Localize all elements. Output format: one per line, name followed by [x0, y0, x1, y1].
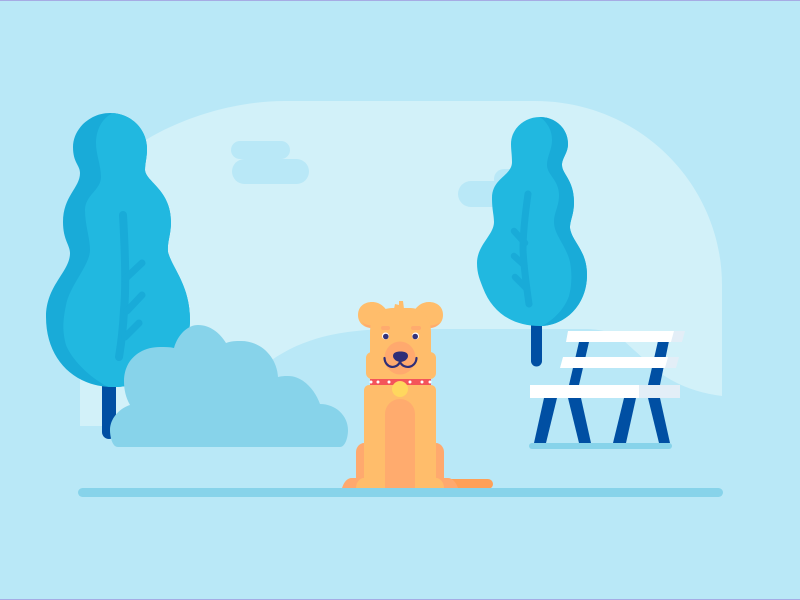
bench ground shadow — [529, 443, 672, 449]
left tree — [46, 113, 190, 439]
bench seat plank — [530, 385, 680, 398]
cloud left — [231, 141, 309, 184]
dog head — [366, 301, 436, 379]
dog tail — [440, 479, 493, 489]
dog collar tag — [392, 381, 408, 397]
dog right ear — [414, 302, 443, 328]
bench legs — [534, 341, 670, 443]
pale backdrop panel — [80, 101, 722, 426]
bottom border line — [0, 599, 800, 600]
dog left ear — [358, 302, 387, 328]
bush — [110, 325, 348, 447]
dog mouth — [384, 358, 416, 367]
right tree trunk — [531, 320, 542, 367]
right tree — [477, 117, 587, 366]
dog — [342, 301, 493, 489]
dog front paws — [356, 478, 444, 488]
right tree veins — [514, 194, 529, 304]
left tree trunk — [102, 375, 116, 439]
dog belly — [385, 399, 415, 488]
dog back paws — [342, 478, 458, 488]
dog collar — [370, 379, 432, 385]
left tree veins — [119, 215, 142, 357]
dog eyebrows — [381, 326, 421, 330]
dog muzzle — [384, 342, 416, 374]
cloud right — [458, 169, 534, 207]
bench middle plank — [560, 357, 679, 368]
right tree crown — [477, 117, 587, 326]
left tree crown — [46, 113, 190, 387]
bench — [529, 331, 685, 449]
top border line — [0, 0, 800, 1]
dog body — [364, 385, 436, 488]
bench top plank — [566, 331, 685, 342]
dog hind legs — [356, 443, 444, 488]
dog eyes — [382, 332, 419, 340]
ground line — [78, 488, 723, 497]
dog nose — [393, 352, 408, 362]
